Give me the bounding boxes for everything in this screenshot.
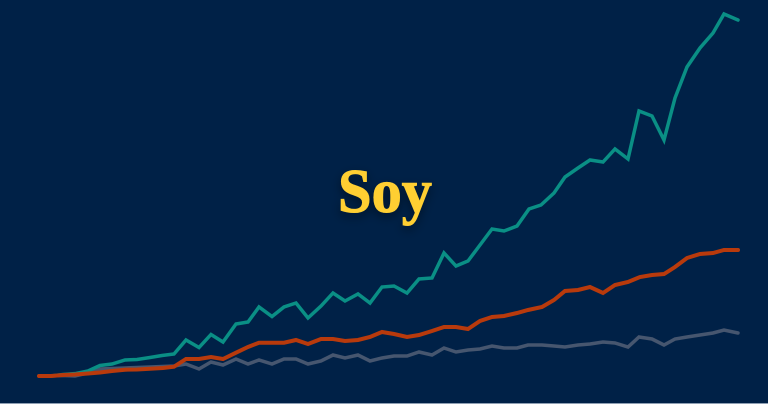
line: grey series (39, 330, 738, 376)
line: orange series (39, 250, 738, 376)
title: Soy (338, 158, 432, 226)
